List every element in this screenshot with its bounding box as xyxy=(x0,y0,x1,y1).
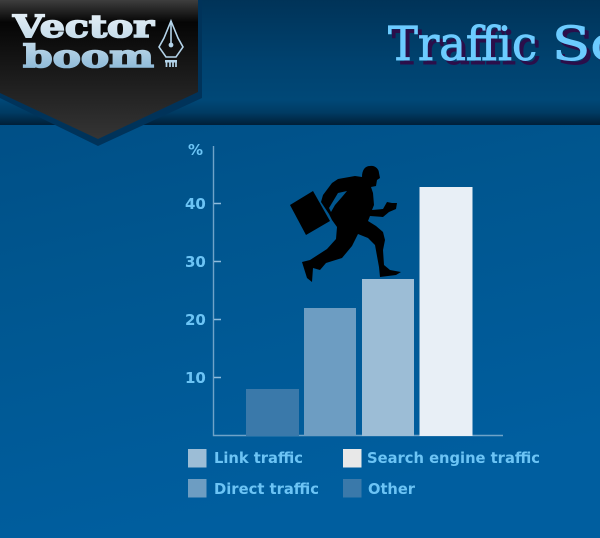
legend: other xyxy=(343,479,415,498)
y axis labels: 20 xyxy=(185,311,206,329)
icon: pen nib xyxy=(159,21,183,67)
axes xyxy=(214,146,503,436)
y axis ticks xyxy=(214,204,221,378)
logo wordmark: boom xyxy=(23,39,154,75)
legend: direct traffic: Direct traffic xyxy=(214,480,319,498)
briefcase xyxy=(290,191,330,235)
y axis labels: 30 xyxy=(185,253,206,271)
y axis labels: 10 xyxy=(185,369,206,387)
logo badge xyxy=(0,0,202,146)
legend xyxy=(188,449,540,498)
y axis labels xyxy=(185,141,206,387)
man xyxy=(302,166,401,282)
logo wordmark xyxy=(12,9,155,75)
title xyxy=(388,17,600,76)
title: Traffic xyxy=(392,21,541,76)
bar chart xyxy=(185,141,503,436)
y axis labels: % xyxy=(188,141,203,159)
legend: link traffic: Link traffic xyxy=(214,449,303,467)
bar: link traffic xyxy=(362,279,414,436)
title: Traffic xyxy=(388,17,537,72)
bar: other xyxy=(246,389,299,436)
y axis labels: 40 xyxy=(185,195,206,213)
runner silhouette with briefcase xyxy=(290,166,401,282)
legend: search engine traffic: Search engine traffic xyxy=(367,449,540,467)
bar: search engine traffic xyxy=(420,187,472,436)
legend: other: Other xyxy=(368,480,415,498)
logo wordmark: Vector xyxy=(12,9,155,45)
header band xyxy=(0,0,600,125)
bar: direct traffic xyxy=(304,308,356,436)
